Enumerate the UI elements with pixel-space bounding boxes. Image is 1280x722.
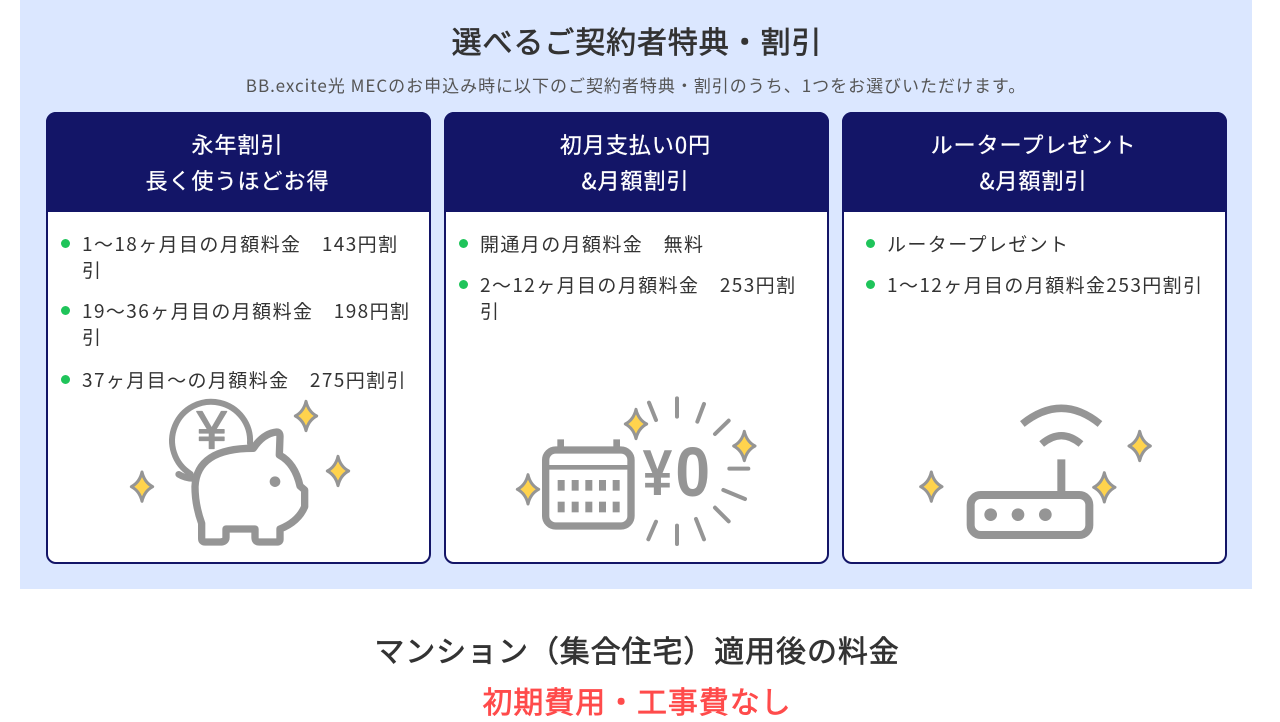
heading: no initial cost: 初期費用・工事費なし [482,678,792,722]
icon: piggy bank with yen coin [131,401,349,542]
card heading: router gift: ルータープレゼント [931,128,1136,160]
panel: benefits background [20,0,1252,589]
list item: months 1-18: 1〜18ヶ月目の月額料金 143円割 [82,230,398,257]
list item: months 1-12: 1〜12ヶ月目の月額料金253円割引 [887,271,1203,298]
list item: months 2-12: 2〜12ヶ月目の月額料金 253円割 [480,271,796,298]
card heading: perpetual discount: 永年割引 [191,128,284,160]
card heading: perpetual discount: 長く使うほどお得 [145,164,330,196]
panel: card router gift [842,112,1227,564]
list item: months 1-18 [61,230,398,283]
list item: router gift: ルータープレゼント [887,230,1069,257]
panel: card perpetual discount [46,112,431,564]
list item: months 19-36: 19〜36ヶ月目の月額料金 198円割 [82,297,410,324]
card heading: router gift: &月額割引 [980,164,1087,196]
card heading: first month free: &月額割引 [582,164,689,196]
card heading: first month free [444,112,829,212]
list item: months 19-36 [61,297,410,350]
card heading: perpetual discount [46,112,431,212]
list item: months 19-36: 引 [82,323,102,350]
card heading: first month free: 初月支払い0円 [560,128,711,160]
heading: apartment pricing: マンション（集合住宅）適用後の料金 [374,627,900,671]
icon: calendar with yen zero: ¥ [643,436,672,509]
subtitle: BB.excite光 MECのお申込み時に以下のご契約者特典・割引のうち、1つをお選びいただけます。 [246,72,1026,97]
title: 選べるご契約者特典・割引 [452,18,822,62]
icon: piggy bank with yen coin: ¥ [196,401,227,460]
list item: month 37 onward: 37ヶ月目〜の月額料金 275円割引 [82,366,407,393]
list item: months 2-12 [459,271,796,324]
list item: opening month: 開通月の月額料金 無料 [480,230,704,257]
icon: calendar with yen zero: 0 [675,433,710,511]
card heading: router gift [842,112,1227,212]
list item: months 2-12: 引 [480,297,500,324]
icon: calendar with yen zero [517,398,755,544]
icon: wifi router [921,408,1150,535]
list item: months 1-18: 引 [82,256,102,283]
panel: card first month free [444,112,829,564]
